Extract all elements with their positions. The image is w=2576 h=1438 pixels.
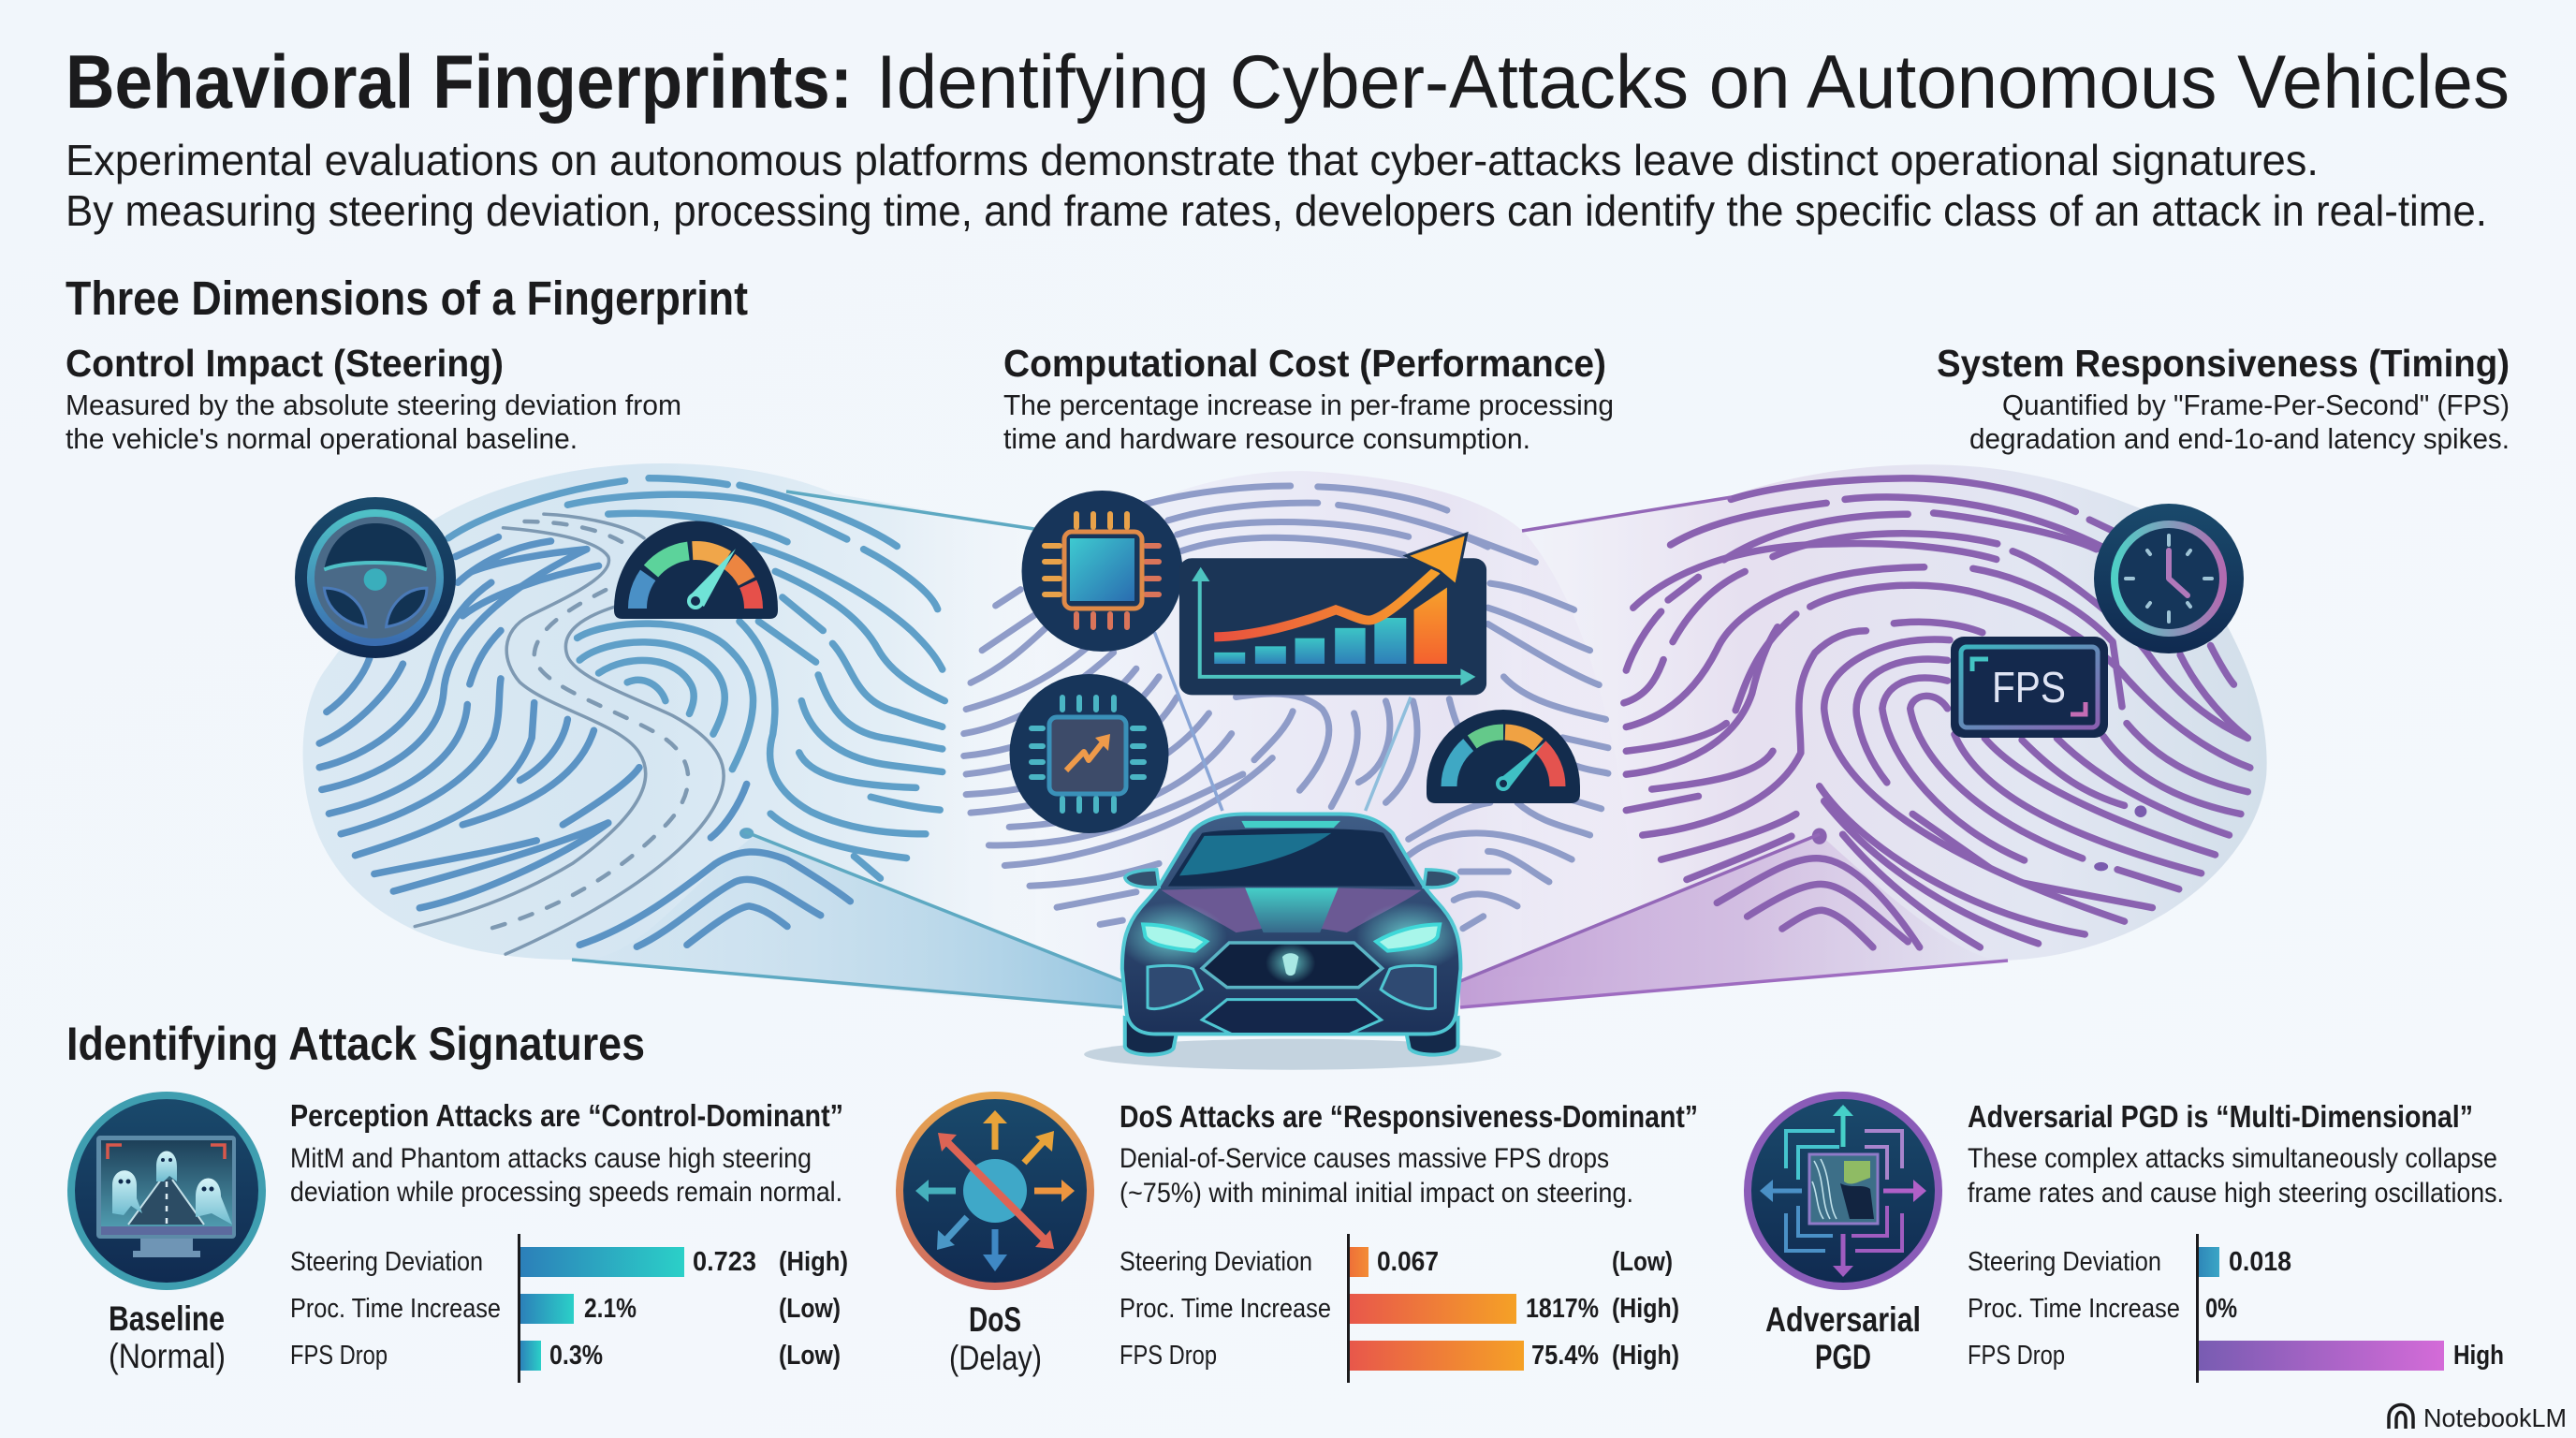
dimension: control impact: the vehicle's normal operational baseline. [66,422,578,455]
dimension: control impact: Measured by the absolute steering deviation from [66,389,681,421]
description: (~75%) with minimal initial impact on steering. [1120,1178,1633,1209]
icon: cpu chip [1022,491,1183,652]
icon: clock [2094,504,2244,653]
bar chart: DoS metrics: Proc. Time Increase [1120,1294,1331,1324]
description: deviation while processing speeds remain normal. [290,1177,842,1208]
intro text: Experimental evaluations on autonomous platforms demonstrate that cyber-attacks leave distinct operational signatures. [66,136,2319,184]
bar chart: DoS metrics: (High) [1612,1341,1679,1371]
icon: chip with trend [1009,674,1168,833]
bar chart: baseline metrics: (Low) [779,1294,841,1324]
bar chart: baseline metrics: FPS Drop [290,1341,388,1371]
bar chart: baseline metrics: Steering Deviation [290,1247,483,1277]
label: adversarial PGD: PGD [1815,1338,1871,1376]
car illustration [1084,814,1501,1070]
fingerprint: system responsiveness ridges [1624,478,2250,947]
dimension: control impact: Control Impact (Steering) [66,342,504,385]
label: baseline: Baseline [109,1299,225,1338]
bar chart: PGD metrics: FPS Drop [1968,1341,2065,1371]
label: baseline [109,1299,226,1375]
icon: gauge center [1427,710,1580,803]
label: baseline: (Normal) [109,1337,226,1375]
description: MitM and Phantom attacks cause high steering [290,1143,812,1174]
label: DoS: DoS [969,1300,1021,1339]
heading: three dimensions: Three Dimensions of a Fingerprint [66,271,748,325]
bar chart: DoS metrics: (High) [1612,1294,1679,1324]
heading: attack signatures: Identifying Attack Signatures [66,1018,645,1070]
bar chart: PGD metrics: Steering Deviation [1968,1247,2161,1277]
dimension: system responsiveness: Quantified by "Frame-Per-Second" (FPS) [2002,389,2510,421]
description: frame rates and cause high steering oscillations. [1968,1178,2504,1209]
dimension: computational cost: Computational Cost (Performance) [1003,342,1606,385]
bar chart: baseline metrics: 2.1% [584,1294,637,1324]
panel: perception attacks [71,1095,848,1383]
icon: gauge left [614,521,778,619]
fingerprint: computational cost ridges [964,486,1608,929]
bar chart: DoS metrics: 0.067 [1377,1247,1439,1277]
icon: rising performance chart [1179,534,1486,695]
heading: multi-dimensional: Adversarial PGD is “Multi-Dimensional” [1968,1099,2473,1134]
dimension: computational cost: The percentage increase in per-frame processing [1003,389,1614,421]
bar chart: baseline metrics [290,1234,848,1383]
bar chart: PGD metrics: 0.018 [2229,1247,2291,1277]
heading: control-dominant: Perception Attacks are “Control-Dominant” [290,1098,843,1133]
panel: DoS attacks [900,1095,1698,1383]
bar chart: DoS metrics: Steering Deviation [1120,1247,1312,1277]
description: These complex attacks simultaneously collapse [1968,1143,2497,1174]
icon: DoS burst [900,1095,1090,1286]
bar chart: PGD metrics: 0% [2205,1294,2237,1324]
dimension: system responsiveness: System Responsiveness (Timing) [1937,342,2510,385]
dimension: system responsiveness [1937,342,2510,455]
intro text [66,136,2487,235]
bar chart: PGD metrics: High [2453,1341,2504,1371]
heading: responsiveness-dominant: DoS Attacks are “Responsiveness-Dominant” [1120,1099,1698,1134]
bar chart: DoS metrics: FPS Drop [1120,1341,1217,1371]
label: adversarial PGD: Adversarial [1765,1300,1921,1339]
bar chart: DoS metrics: 75.4% [1531,1341,1599,1371]
description [1120,1143,1633,1209]
bar chart: PGD metrics [1968,1234,2504,1383]
connector lines [1154,632,1411,811]
intro text: By measuring steering deviation, processing time, and frame rates, developers can identify the specific class of an attack in real-time. [66,186,2487,235]
title: Identifying Cyber-Attacks on Autonomous Vehicles [876,40,2510,125]
bar chart: DoS metrics [1120,1234,1679,1383]
fingerprint backdrops and beams [303,463,2267,1007]
beam outlines [572,492,2008,1007]
road [415,514,724,954]
description [290,1143,842,1208]
bar chart: baseline metrics: (High) [779,1247,848,1277]
description [1968,1143,2504,1209]
bar chart: baseline metrics: (Low) [779,1341,841,1371]
bar chart: PGD metrics: Proc. Time Increase [1968,1294,2180,1324]
panel: adversarial PGD [1748,1095,2504,1383]
bar chart: baseline metrics: Proc. Time Increase [290,1294,501,1324]
title: Behavioral Fingerprints: [66,40,853,125]
dimension: computational cost [1003,342,1614,455]
dimension: control impact [66,342,681,455]
label: adversarial PGD [1765,1300,1921,1376]
icon: baseline monitor with ghosts [71,1095,262,1286]
fingerprint: control impact ridges [319,478,944,954]
icon: FPS badge: FPS [1992,663,2066,712]
icon: adversarial maze [1748,1095,1939,1286]
NotebookLM logo: NotebookLM [2423,1403,2567,1432]
icon: steering wheel [295,497,456,658]
label: DoS: (Delay) [949,1339,1042,1377]
description: Denial-of-Service causes massive FPS drops [1120,1143,1609,1174]
bar chart: baseline metrics: 0.3% [549,1341,603,1371]
title [66,40,2510,125]
bar chart: DoS metrics: (Low) [1612,1247,1673,1277]
dimension: system responsiveness: degradation and end-1o-and latency spikes. [1969,422,2510,455]
bar chart: baseline metrics: 0.723 [693,1247,756,1277]
dimension: computational cost: time and hardware resource consumption. [1003,422,1530,455]
label: DoS [949,1300,1042,1377]
bar chart: DoS metrics: 1817% [1526,1294,1599,1324]
icon: FPS badge [1951,637,2108,738]
